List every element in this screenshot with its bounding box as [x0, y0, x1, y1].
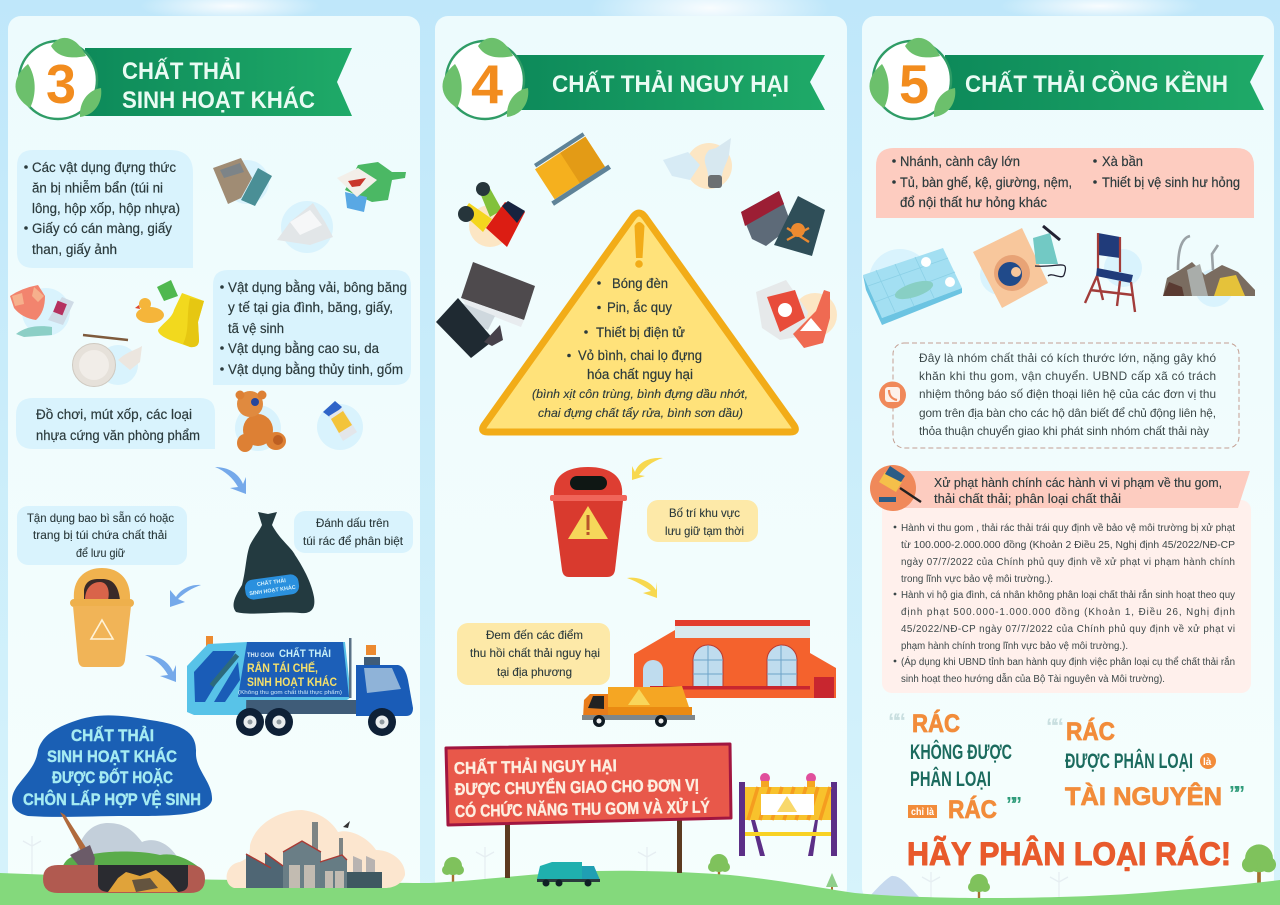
icon: road barrier — [739, 773, 837, 856]
icon: blue garbage truck — [187, 636, 413, 736]
slogan: sorted waste: là — [1203, 757, 1212, 768]
penalty box: sinh hoạt theo hướng dẫn của Bộ Tài nguyên và Môi trường). — [901, 674, 1165, 685]
slogan: sorted waste: ” — [1235, 783, 1245, 805]
callout: burned or buried — [12, 715, 212, 817]
penalty box: định phạt 500.000-1.000.000 đồng (Khoản 1, Điều 26, Nghị định — [901, 607, 1235, 618]
slogan: call to action: HÃY PHÂN LOẠI RÁC! — [907, 836, 1231, 872]
icon: teddy bear — [235, 390, 286, 452]
slogan: sorted waste: RÁC — [1066, 717, 1115, 746]
penalty box: từ 100.000-2.000.000 đồng (Khoản 2 Điều 25, Nghị định 45/2022/NĐ-CP — [901, 540, 1235, 551]
slogan: unsorted waste: ” — [1012, 794, 1022, 816]
penalty box: (Áp dụng khi UBND tỉnh ban hành quy định việc phân loại cụ thể chất thải rắn — [901, 657, 1235, 668]
text box: food containers: Các vật dụng đựng thức — [32, 160, 176, 175]
slogan: unsorted waste: RÁC — [912, 709, 960, 738]
text box: bulky items: Xà bần — [1102, 154, 1143, 169]
bubble: mark the bag: Đánh dấu trên — [316, 516, 389, 530]
header: panel 4 — [442, 38, 825, 119]
icon: yellow bottle — [317, 401, 363, 450]
text box: fabric rubber ceramic: Vật dụng bằng thủy tinh, gốm — [228, 362, 403, 377]
header: panel 3 — [15, 38, 352, 119]
heading — [122, 56, 315, 114]
penalty box: 45/2022/NĐ-CP ngày 07/7/2022 của Chính phủ quy định về xử phạt vi — [901, 624, 1235, 635]
icon: chair — [1085, 233, 1142, 312]
text box: fabric rubber ceramic: Vật dụng bằng cao su, da — [228, 341, 379, 356]
text box: fabric rubber ceramic: y tế tại gia đình, băng, giấy, — [228, 300, 393, 315]
slogan: unsorted waste: RÁC — [948, 795, 997, 824]
dashed notice box: gom trên địa bàn cho các hộ dân biết để chủ động liên hệ, — [919, 406, 1216, 420]
sign: hazardous waste transfer: ĐƯỢC CHUYỂN GIAO CHO ĐƠN VỊ — [455, 776, 699, 799]
icon: car battery — [529, 130, 611, 206]
icon: blue garbage truck: RẮN TÁI CHẾ, — [247, 660, 318, 675]
icon: small teal truck — [537, 862, 600, 886]
arrow: yellow to collection point — [627, 578, 657, 598]
text box: food containers — [17, 150, 193, 268]
slogan: sorted waste: “ — [1053, 714, 1064, 739]
heading: CHẤT THẢI CỒNG KỀNH — [965, 69, 1228, 98]
bubble: reuse packaging: để lưu giữ — [76, 546, 125, 560]
icon: diaper bottle mask — [10, 285, 74, 337]
arrow: down to bag — [215, 467, 246, 494]
slogan: unsorted waste: chỉ là — [911, 807, 934, 818]
slogan: sorted waste: ” — [1229, 783, 1239, 805]
header: panel 5 — [869, 38, 1264, 119]
panel: chất thải cồng kềnh — [862, 16, 1274, 901]
penalty box — [870, 465, 1251, 693]
icon: batteries — [458, 182, 525, 247]
background windmills and trees — [23, 836, 1276, 905]
slogan: unsorted waste — [888, 709, 1022, 824]
bubble: collection point — [457, 623, 610, 685]
icon: broken bulb — [663, 138, 732, 189]
warning triangle list: Pin, ắc quy — [607, 300, 672, 315]
panel: chất thải nguy hại — [435, 16, 847, 901]
slogan: unsorted waste: KHÔNG ĐƯỢC — [910, 740, 1012, 764]
penalty box: trong lĩnh vực bảo vệ môi trường.). — [901, 574, 1053, 585]
bubble: collection point: thu hồi chất thải nguy hại — [470, 646, 600, 660]
icon: duck and yellow boots — [135, 280, 204, 347]
warning triangle list: Bóng đèn — [612, 276, 668, 291]
badge — [15, 38, 101, 119]
penalty box: Xử phạt hành chính các hành vi vi phạm về thu gom, — [934, 476, 1222, 490]
icon: blue garbage truck: THU GOM — [247, 652, 274, 659]
sign: hazardous waste transfer: CHẤT THẢI NGUY HẠI — [454, 756, 617, 778]
icon: plate cup pencil — [72, 335, 142, 386]
dashed notice box: nhiệm thông báo số điện thoại liên hệ của các đơn vị thu — [919, 387, 1216, 401]
icon: trash bag: CHẤT THẢI — [257, 577, 287, 588]
warning triangle list — [483, 213, 795, 432]
penalty box: thải chất thải; phân loại chất thải — [934, 492, 1121, 506]
ribbon — [85, 48, 352, 116]
icon: yellow recycle bin — [70, 568, 134, 667]
text box: food containers: ăn bị nhiễm bẩn (túi ni — [32, 180, 163, 196]
text box: toys and hard plastic — [16, 398, 215, 449]
bubble: reuse packaging — [17, 506, 187, 565]
slogan: unsorted waste: “ — [895, 709, 906, 734]
text box: toys and hard plastic: nhựa cứng văn phòng phẩm — [36, 428, 200, 443]
callout: burned or buried: CHẤT THẢI — [71, 726, 154, 745]
text box: bulky items: Thiết bị vệ sinh hư hỏng — [1102, 175, 1240, 190]
arrow: yellow to bin — [632, 458, 663, 480]
number 5: 5 — [899, 53, 929, 115]
callout: burned or buried: SINH HOẠT KHÁC — [47, 747, 177, 766]
icon: phone — [879, 382, 906, 408]
text box: toys and hard plastic: Đồ chơi, mút xốp, các loại — [36, 407, 192, 422]
slogan: sorted waste — [1046, 714, 1245, 811]
badge — [869, 38, 955, 119]
icon: crumpled foam box — [277, 201, 333, 253]
text box: bulky items: Tủ, bàn ghế, kệ, giường, nệm, — [900, 175, 1072, 190]
slogan: sorted waste: “ — [1046, 714, 1057, 739]
icon: blue garbage truck: SINH HOẠT KHÁC — [247, 674, 337, 689]
callout: burned or buried: CHÔN LẤP HỢP VỆ SINH — [23, 790, 201, 809]
penalty box: Hành vi hộ gia đình, cá nhân không phân loại chất thải rắn sinh hoạt theo quy — [901, 590, 1235, 601]
text box: bulky items — [876, 148, 1254, 218]
dashed notice box: thỏa thuận chuyển giao khi phát sinh nhóm chất thải này — [919, 424, 1209, 438]
text box: food containers: lông, hộp xốp, hộp nhựa) — [32, 201, 180, 216]
icon: red hazard bin — [550, 467, 627, 577]
dashed notice box: khăn khi thu gom, vận chuyển. UBND cấp xã có trách — [919, 369, 1216, 383]
text box: fabric rubber ceramic: Vật dụng bằng vải, bông băng — [228, 280, 407, 295]
number 3: 3 — [46, 53, 76, 115]
icon: broken monitor and phone — [436, 262, 535, 358]
text box: bulky items: đổ nội thất hư hỏng khác — [900, 195, 1047, 210]
ribbon — [515, 55, 825, 110]
icon: mattress — [863, 248, 962, 325]
dashed notice box: Đây là nhóm chất thải có kích thước lớn, nặng gây khó — [919, 351, 1216, 365]
heading: SINH HOẠT KHÁC — [122, 86, 315, 114]
icon: landfill — [43, 812, 205, 893]
icon: rubble pile — [1163, 236, 1255, 307]
icon: food box and green bag — [337, 162, 406, 212]
icon: trash bag — [234, 512, 314, 614]
panel: chất thải sinh hoạt khác — [8, 16, 420, 901]
sign: hazardous waste transfer: CÓ CHỨC NĂNG THU GOM VÀ XỬ LÝ — [455, 798, 711, 821]
text box: fabric rubber ceramic — [213, 270, 411, 385]
icon: incinerator factory — [227, 810, 405, 888]
icon: collection building — [634, 620, 836, 698]
icon: chemical containers — [756, 280, 837, 348]
text box: bulky items: Nhánh, cành cây lớn — [900, 154, 1020, 169]
badge — [442, 38, 528, 119]
penalty box: phạm hành chính trong lĩnh vực bảo vệ môi trường.). — [901, 641, 1128, 652]
text box: food containers: than, giấy ảnh — [32, 242, 117, 257]
warning triangle list: chai đựng chất tẩy rửa, bình sơn dầu) — [538, 406, 743, 420]
text box: food containers: Giấy có cán màng, giấy — [32, 221, 172, 236]
penalty box: ngày 07/7/2022 của Chính phủ quy định về xử phạt vi phạm hành chính — [901, 557, 1235, 568]
text box: fabric rubber ceramic: tã vệ sinh — [228, 321, 284, 336]
slogan: unsorted waste: ” — [1006, 794, 1016, 816]
bubble: collection point: Đem đến các điểm — [486, 628, 583, 642]
icon: blue garbage truck: (Không thu gom chất thải thực phẩm) — [238, 689, 342, 696]
arrow: to bin — [170, 585, 201, 607]
ribbon — [945, 55, 1264, 110]
callout: burned or buried: ĐƯỢC ĐỐT HOẶC — [52, 767, 173, 787]
green ground — [0, 871, 1280, 905]
warning triangle list: hóa chất nguy hại — [587, 367, 693, 382]
slogan: unsorted waste: PHÂN LOẠI — [910, 767, 991, 791]
heading: CHẤT THẢI — [122, 56, 241, 85]
icon: gavel — [870, 465, 921, 511]
bubble: mark the bag: túi rác để phân biệt — [303, 534, 404, 548]
sign: hazardous waste transfer — [446, 744, 731, 878]
icon: blue garbage truck: CHẤT THẢI — [279, 647, 331, 660]
bubble: collection point: tại địa phương — [497, 665, 572, 679]
icon: orange hazard truck — [582, 686, 695, 727]
heading: CHẤT THẢI NGUY HẠI — [552, 69, 789, 98]
bubble: reuse packaging: Tận dụng bao bì sẵn có hoặc — [27, 510, 174, 525]
penalty box: Hành vi thu gom , thải rác thải trái quy định về bảo vệ môi trường bị xử phạt — [901, 523, 1235, 534]
slogan: sorted waste: ĐƯỢC PHÂN LOẠI — [1065, 749, 1193, 773]
number 4: 4 — [471, 53, 503, 115]
warning triangle list: (bình xịt côn trùng, bình đựng dầu nhớt, — [532, 387, 748, 401]
bubble: temporary storage: Bố trí khu vực — [669, 506, 740, 520]
slogan: sorted waste: TÀI NGUYÊN — [1065, 781, 1222, 811]
bubble: temporary storage — [647, 500, 758, 542]
icon: cardboard and paper — [213, 158, 272, 206]
icon: washing machine and kettle — [973, 226, 1066, 308]
bubble: reuse packaging: trang bị túi chứa chất thải — [33, 528, 167, 542]
arrow: to truck — [145, 655, 176, 682]
bubble: mark the bag — [294, 511, 413, 553]
icon: trash bag: SINH HOẠT KHÁC — [249, 584, 296, 597]
warning triangle list: Vỏ bình, chai lọ đựng — [578, 348, 702, 363]
icon: paint can and jug — [741, 191, 825, 256]
warning triangle list: Thiết bị điện tử — [596, 325, 685, 340]
dashed notice box — [879, 343, 1239, 448]
bubble: temporary storage: lưu giữ tạm thời — [665, 524, 744, 538]
slogan: unsorted waste: “ — [888, 709, 899, 734]
